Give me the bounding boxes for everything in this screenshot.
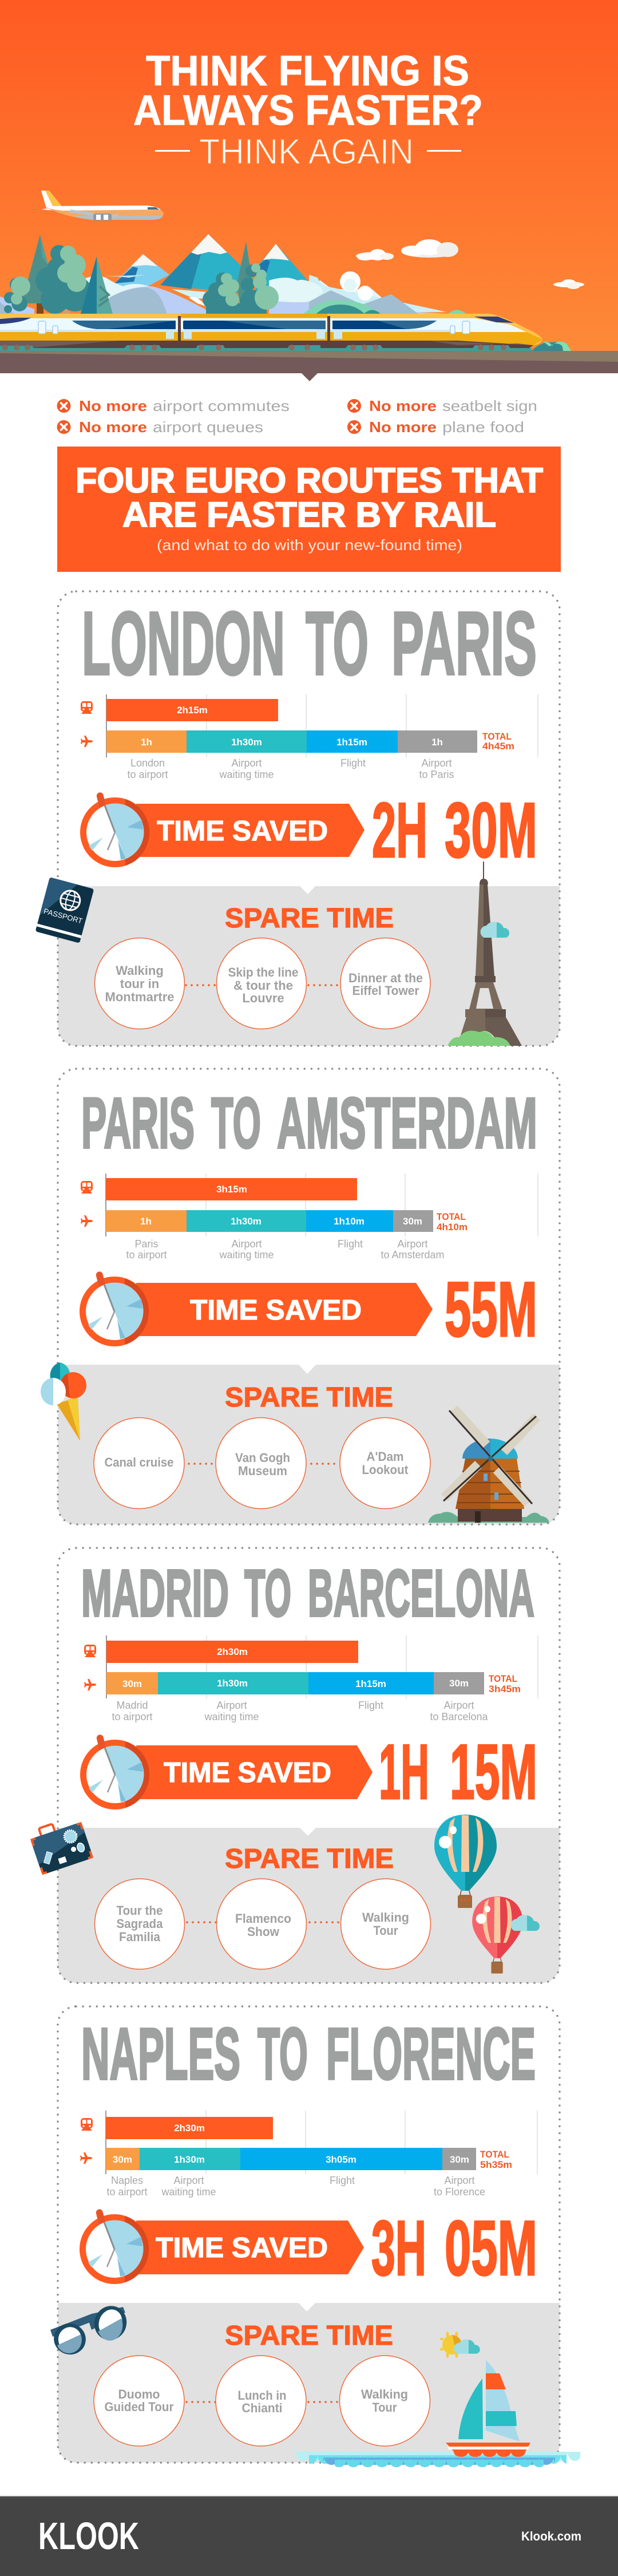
panel: Paris to Amsterdam: [41, 1069, 560, 1524]
chart: journey times: Flight: [330, 2175, 355, 2186]
chart: journey times: 1h: [431, 737, 443, 748]
spare time activities: Van Gogh: [235, 1451, 290, 1465]
spare time background: [58, 1828, 560, 1983]
spare time activities: Canal cruise: [104, 1455, 174, 1469]
route title: [81, 1084, 537, 1163]
chart: journey times: 3h15m: [216, 1184, 247, 1195]
time saved value: 55M: [445, 1266, 537, 1353]
chart: journey times: to airport: [126, 1249, 167, 1261]
spare time activities: Familia: [119, 1930, 161, 1944]
chart: journey times: to airport: [127, 769, 168, 780]
chart: journey times: 3h45m: [489, 1684, 521, 1694]
chart: journey times: 30m: [122, 1678, 142, 1689]
icon: sunglasses: [49, 2301, 132, 2359]
chart: journey times: TOTAL: [480, 2149, 509, 2160]
spare time background: [58, 886, 560, 1046]
time saved value: [372, 787, 537, 874]
spare time activities: Tour the: [117, 1903, 163, 1918]
spare time activities: Sagrada: [117, 1917, 163, 1931]
chart: journey times: waiting time: [161, 2186, 216, 2198]
spare time activities: Lunch in: [238, 2388, 286, 2403]
time saved arrow: [80, 792, 365, 867]
subtitle: think again: THINK AGAIN: [199, 132, 414, 172]
chart: journey times: 1h30m: [231, 737, 262, 748]
spare time heading: SPARE TIME: [225, 2321, 393, 2351]
chart: journey times: Airport: [173, 2175, 204, 2186]
spare time activities: Dinner at the: [348, 971, 423, 985]
main title: THINK FLYING IS: [146, 47, 469, 94]
chart: journey times: 2h15m: [177, 705, 208, 716]
website: Klook.com: [521, 2529, 581, 2543]
time saved value: [379, 1728, 537, 1815]
spare time heading: SPARE TIME: [225, 1382, 393, 1413]
time saved value: 30M: [445, 787, 537, 874]
chart: journey times: Airport: [444, 2175, 475, 2186]
spare time activities: Flamenco: [235, 1911, 291, 1926]
list: no more items: No more: [79, 397, 147, 414]
spare time activities: Guided Tour: [104, 2400, 174, 2414]
time saved value: [371, 2204, 537, 2291]
panel: Madrid to Barcelona: [28, 1548, 560, 1983]
chart: journey times: to Paris: [419, 769, 454, 780]
spare time activities: Walking: [116, 963, 164, 978]
chart: journey times: waiting time: [219, 769, 274, 780]
spare time activities: [94, 1417, 430, 1509]
spare time activities: Walking: [362, 1910, 409, 1925]
chart: journey times: to Barcelona: [430, 1711, 489, 1722]
chart: journey times: 30m: [113, 2154, 132, 2165]
chart: journey times: Airport: [231, 757, 262, 769]
illustration: trees: [4, 235, 571, 351]
chart: journey times: Naples: [111, 2175, 143, 2186]
chart: journey times: 30m: [403, 1216, 422, 1227]
illustration: high speed train: [0, 314, 542, 351]
chart: journey times: [81, 694, 538, 780]
illustration: mountains and hills: [0, 234, 466, 314]
chart: journey times: 2h30m: [217, 1646, 248, 1657]
chart: journey times: 2h30m: [174, 2123, 205, 2134]
spare time activities: A'Dam: [366, 1449, 404, 1464]
dotted panel border: [58, 1069, 560, 1524]
spare time activities: Walking: [361, 2387, 408, 2401]
route title: TO: [258, 2013, 308, 2095]
chart: journey times: 4h45m: [482, 741, 514, 752]
chart: journey times: 1h10m: [334, 1216, 365, 1227]
spare time activities: Chianti: [241, 2401, 283, 2415]
spare time activities: [95, 938, 430, 1029]
chart: journey times: 5h35m: [480, 2159, 512, 2170]
time saved value: 3H: [371, 2204, 426, 2291]
time saved arrow: [80, 1271, 433, 1346]
dotted panel border: [58, 1548, 560, 1983]
spare time activities: Louvre: [242, 991, 284, 1005]
spare time activities: Skip the line: [228, 965, 299, 979]
spare time background: [58, 2303, 560, 2463]
illustration: airplane: [41, 191, 164, 220]
chart: journey times: Airport: [216, 1700, 247, 1711]
route title: LONDON: [82, 594, 285, 694]
chart: journey times: Airport: [421, 757, 452, 769]
time saved arrow: [80, 1734, 373, 1809]
icon: hot air balloons: [434, 1815, 540, 1973]
icon: suitcase: [28, 1815, 93, 1875]
chart: journey times: to airport: [106, 2186, 148, 2198]
spare time activities: Museum: [238, 1464, 287, 1478]
icon: Eiffel Tower: [447, 862, 522, 1046]
route title: [81, 1556, 534, 1630]
chart: journey times: to Amsterdam: [381, 1249, 445, 1261]
chart: journey times: 4h10m: [437, 1222, 468, 1232]
spare time heading: SPARE TIME: [225, 1844, 394, 1874]
spare time activities: & tour the: [233, 978, 293, 993]
icon: windmill: [428, 1409, 549, 1523]
panel: Naples to Florence: [49, 2006, 580, 2468]
time saved arrow: TIME SAVED: [157, 816, 328, 847]
chart: journey times: TOTAL: [482, 731, 512, 742]
banner: four euro routes: [57, 447, 561, 572]
spare time activities: Montmartre: [105, 990, 174, 1004]
time saved value: 15M: [450, 1728, 537, 1815]
chart: journey times: TOTAL: [489, 1673, 517, 1684]
chart: journey times: Airport: [397, 1238, 428, 1250]
list: no more items: No more: [79, 418, 147, 436]
list: no more items: airport commutes: [153, 397, 290, 414]
list: no more items: [57, 397, 537, 436]
route title: TO: [211, 1084, 261, 1163]
chart: journey times: waiting time: [219, 1249, 274, 1261]
main title: ALWAYS FASTER?: [133, 86, 483, 134]
route title: PARIS: [81, 1084, 195, 1163]
chart: journey times: 3h05m: [326, 2154, 356, 2165]
time saved arrow: [80, 2208, 364, 2284]
dotted panel border: [58, 2006, 560, 2463]
header background: [0, 0, 618, 351]
chart: journey times: Airport: [443, 1700, 474, 1711]
list: no more items: No more: [369, 418, 437, 436]
list: no more items: plane food: [442, 418, 524, 436]
chart: journey times: 30m: [449, 1678, 469, 1689]
time saved value: 05M: [445, 2204, 537, 2291]
route title: [81, 2013, 536, 2095]
spare time background: [58, 1365, 560, 1524]
list: no more items: No more: [369, 397, 437, 414]
chart: journey times: Paris: [134, 1238, 159, 1250]
chart: journey times: Flight: [340, 757, 366, 769]
chart: journey times: [80, 2111, 537, 2198]
list: no more items: airport queues: [153, 418, 263, 436]
icon: sailboat: [446, 2360, 530, 2457]
chart: journey times: 1h30m: [174, 2154, 205, 2165]
illustration: sea waves: [296, 2452, 580, 2468]
illustration: clouds: [356, 239, 584, 289]
icon: passport: [35, 877, 94, 943]
main title: [133, 47, 483, 134]
time saved arrow: TIME SAVED: [164, 1757, 331, 1788]
chart: journey times: Madrid: [116, 1700, 148, 1711]
dotted panel border: [58, 591, 560, 1046]
icon: ice cream: [41, 1362, 86, 1441]
icon: sun and cloud: [440, 2332, 480, 2358]
spare time heading: SPARE TIME: [225, 903, 394, 934]
chart: journey times: 1h30m: [217, 1678, 248, 1689]
chart: journey times: Airport: [231, 1238, 262, 1250]
chart: journey times: TOTAL: [437, 1211, 466, 1222]
chart: journey times: 1h: [140, 1216, 152, 1227]
time saved arrow: TIME SAVED: [156, 2233, 328, 2263]
spare time activities: Tour: [373, 1923, 398, 1938]
banner: four euro routes: ARE FASTER BY RAIL: [122, 495, 496, 534]
spare time activities: Eiffel Tower: [352, 983, 419, 998]
time saved value: 2H: [372, 787, 427, 874]
route title: TO: [306, 594, 369, 694]
banner: four euro routes: (and what to do with your new-found time): [157, 536, 462, 554]
chart: journey times: London: [130, 757, 165, 769]
time saved arrow: TIME SAVED: [190, 1295, 362, 1326]
icon: passport: PASSPORT: [43, 907, 84, 925]
banner: four euro routes: FOUR EURO ROUTES THAT: [76, 461, 543, 500]
chart: journey times: [84, 1635, 538, 1722]
spare time activities: Duomo: [118, 2387, 160, 2401]
chart: journey times: 1h30m: [231, 1216, 262, 1227]
ground strip with pointer: [0, 351, 618, 381]
spare time activities: [94, 2356, 430, 2446]
chart: journey times: 1h15m: [355, 1678, 386, 1689]
chart: journey times: to airport: [112, 1711, 153, 1722]
spare time activities: tour in: [120, 977, 159, 991]
logo: Klook: KLOOK: [38, 2515, 139, 2558]
route title: MADRID: [81, 1556, 229, 1630]
footer bar: [0, 2496, 618, 2576]
chart: journey times: Flight: [338, 1238, 363, 1250]
list: no more items: seatbelt sign: [442, 397, 537, 414]
panel: London to Paris: [35, 591, 560, 1046]
spare time activities: [95, 1879, 430, 1969]
chart: journey times: to Florence: [434, 2186, 485, 2198]
time saved value: 1H: [379, 1728, 429, 1815]
route title: TO: [244, 1556, 291, 1630]
chart: journey times: waiting time: [204, 1711, 259, 1722]
chart: journey times: Flight: [358, 1700, 383, 1711]
spare time activities: Lookout: [362, 1463, 409, 1477]
chart: journey times: 1h: [141, 737, 152, 748]
chart: journey times: [81, 1174, 538, 1261]
chart: journey times: 30m: [450, 2154, 469, 2165]
spare time activities: Tour: [372, 2400, 397, 2415]
spare time activities: Show: [247, 1925, 280, 1939]
route title: NAPLES: [81, 2013, 240, 2095]
chart: journey times: 1h15m: [336, 737, 367, 748]
